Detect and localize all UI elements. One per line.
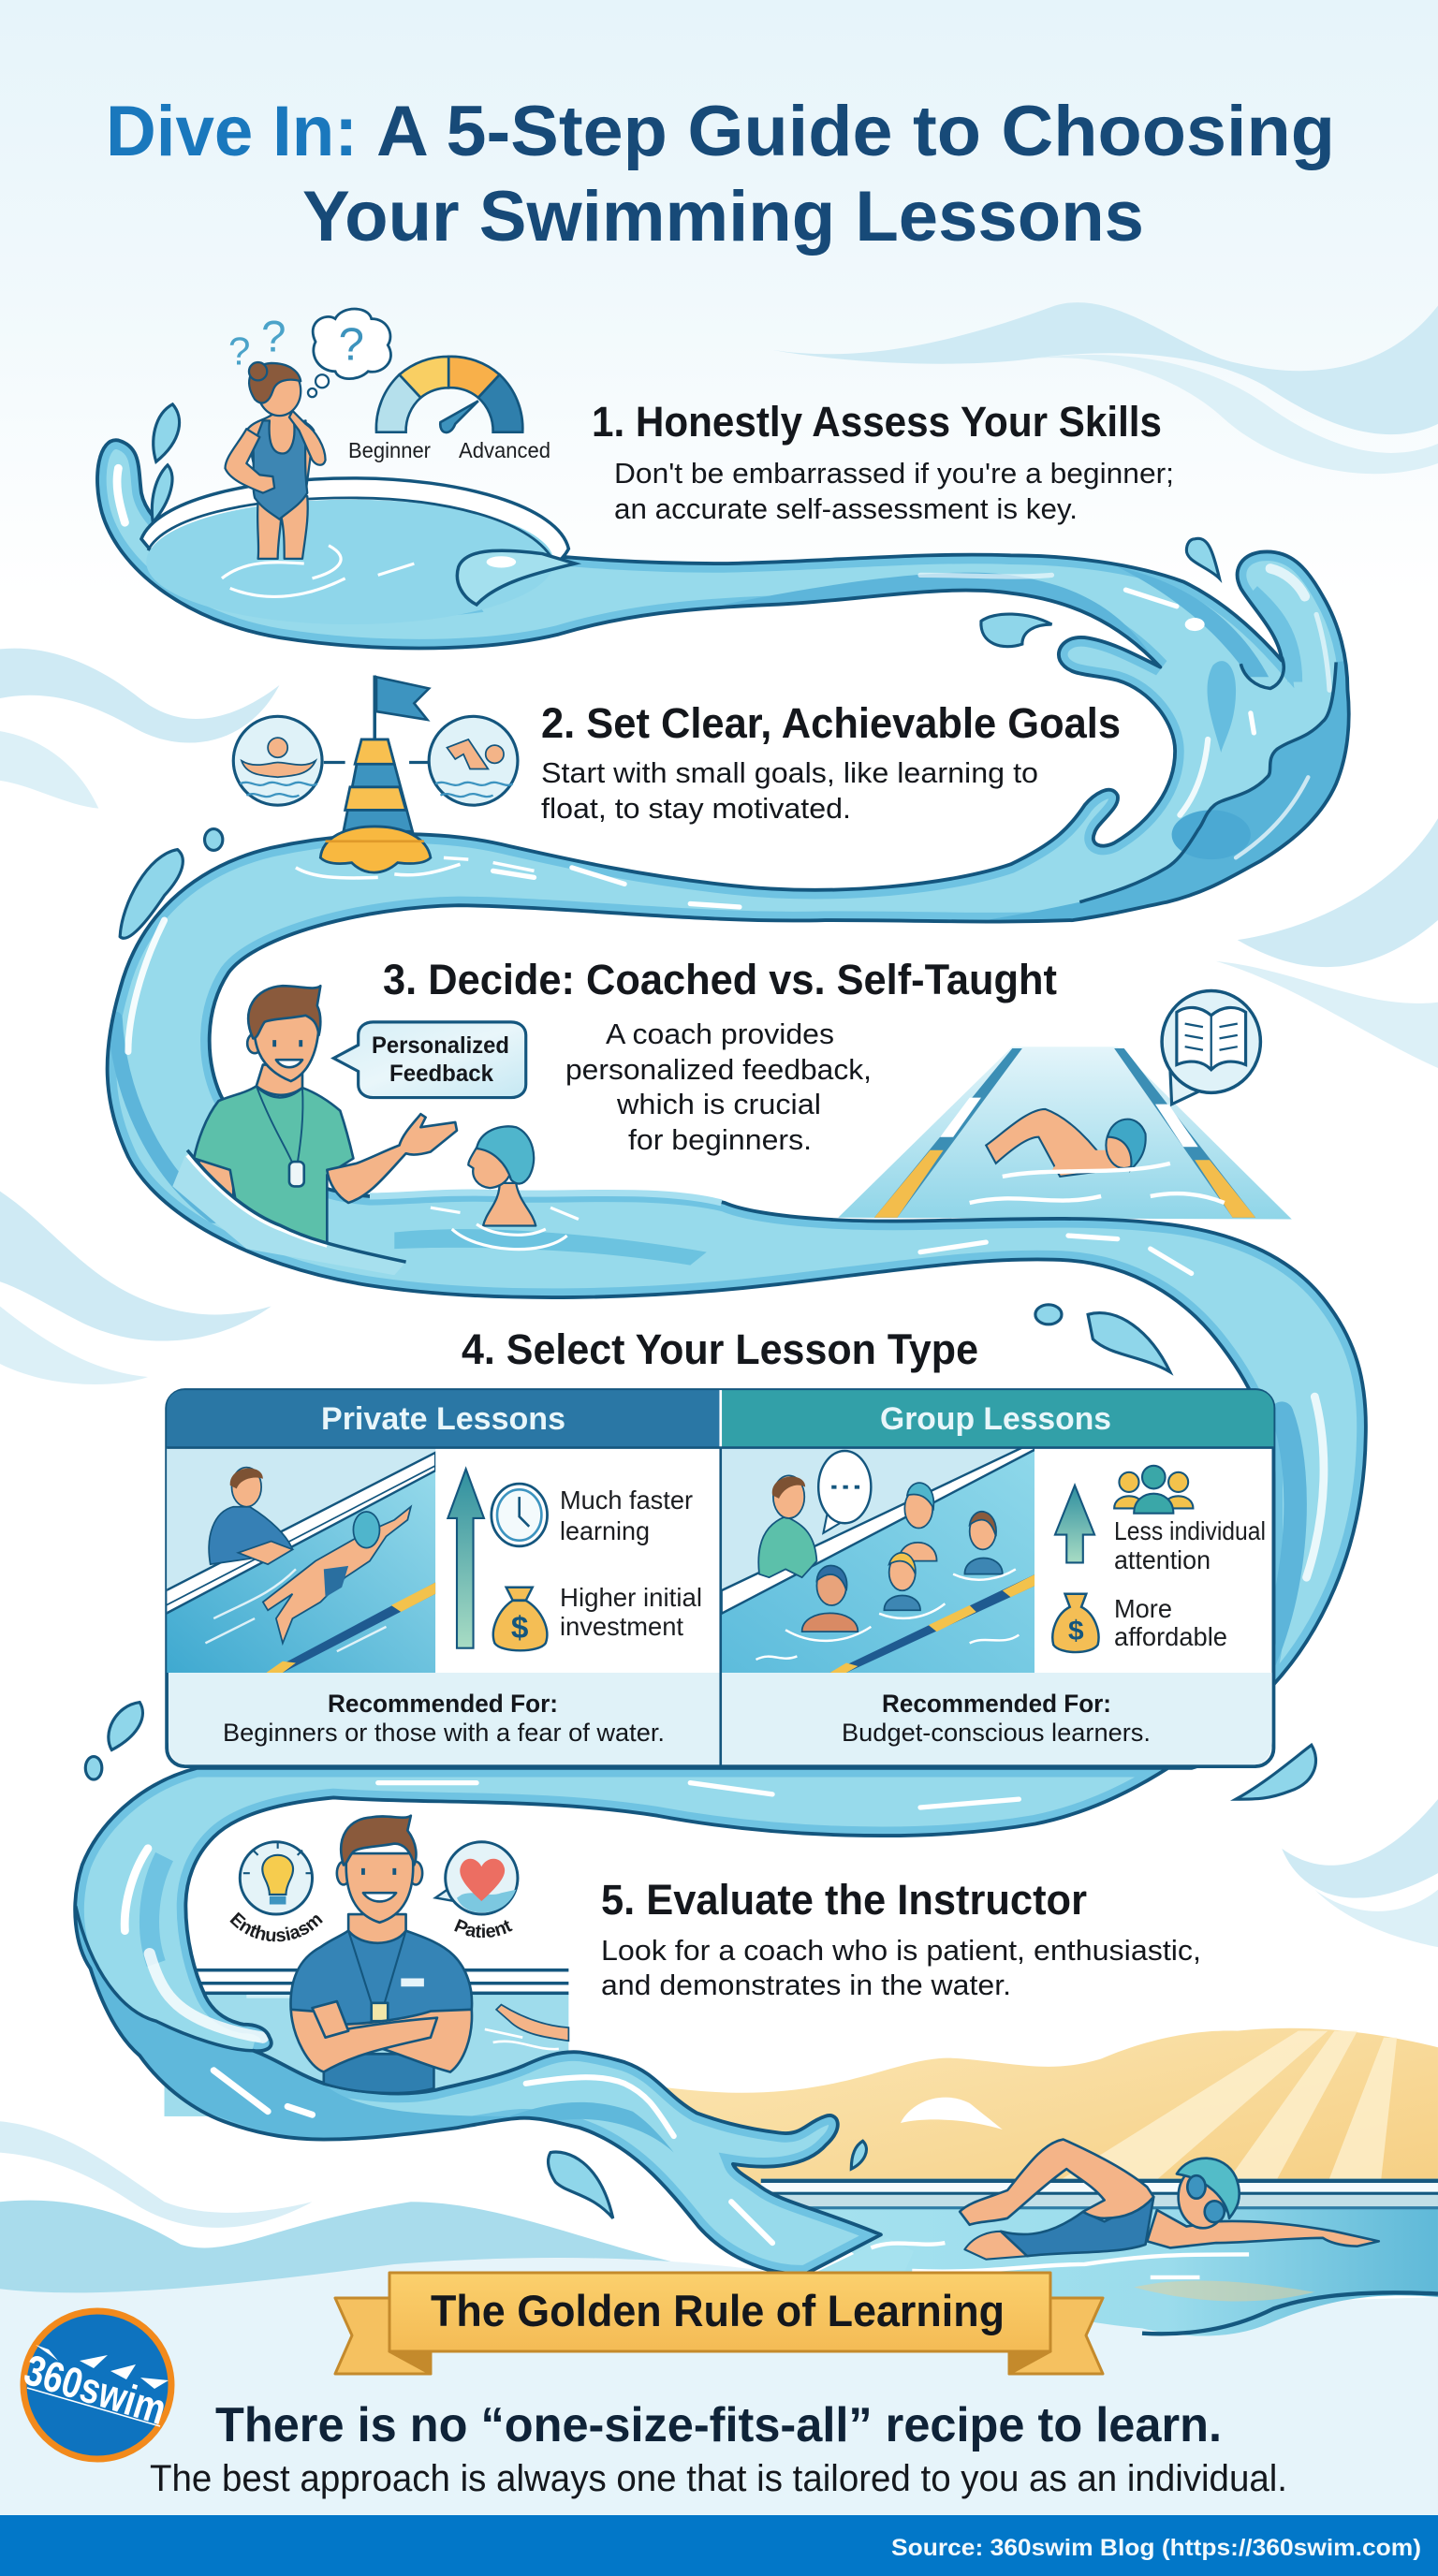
icon: heart bubble [435, 1842, 518, 1914]
step 4 comparison table [166, 1390, 1273, 1766]
icon: question marks [228, 313, 286, 373]
soft water surface by the girl [370, 1193, 722, 1203]
table benefit labels: Higher initial [560, 1583, 702, 1612]
icon: light bulb [240, 1842, 313, 1914]
gauge icon [376, 357, 522, 432]
golden rule message: The best approach is always one that is tailored to you as an individual. [150, 2458, 1287, 2499]
water drops [85, 404, 1316, 2218]
splash hook [1240, 657, 1284, 689]
speech bubble text [372, 1032, 509, 1087]
icon: thought cloud [308, 309, 390, 397]
speech bubble text: Feedback [389, 1061, 493, 1087]
arrow: faster learning [448, 1469, 484, 1648]
icon: thought cloud: ? [339, 319, 364, 370]
girl in water [431, 1126, 579, 1250]
ripples [205, 500, 414, 596]
final pool [761, 2179, 1438, 2336]
table recommendations: Recommended For: [328, 1690, 558, 1718]
table recommendations: Budget-conscious learners. [842, 1719, 1151, 1747]
water ribbon winding through all steps [59, 440, 1372, 2292]
table benefit labels: Less individual [1114, 1516, 1266, 1545]
flag [374, 675, 429, 739]
sand hills and sun rays [661, 2028, 1438, 2260]
step 3 text: personalized feedback, [565, 1053, 872, 1086]
golden rule message [150, 2398, 1287, 2499]
table benefit labels: Much faster [560, 1486, 693, 1515]
instructor figure [291, 1816, 472, 2093]
arrow: less attention [1055, 1486, 1094, 1562]
title: Dive In: [106, 92, 358, 171]
buoy and goal icons [233, 675, 535, 878]
table headers: Private Lessons [321, 1401, 565, 1437]
crossed arms [329, 2010, 472, 2072]
table benefit labels: investment [560, 1612, 683, 1641]
golden rule ribbon banner [335, 2273, 1103, 2374]
inner contour on lower left band [76, 1906, 253, 2051]
step 2 text: float, to stay motivated. [541, 792, 851, 825]
logo: 360swim: 360swim [19, 2345, 172, 2434]
step 5 text: 5. Evaluate the Instructor [601, 1876, 1087, 1924]
inner contour at right splash [1079, 662, 1336, 902]
icon: question marks: ? [261, 313, 286, 362]
step 4 heading: 4. Select Your Lesson Type [462, 1325, 978, 1373]
tail blend into pool [785, 2238, 914, 2292]
final swimmer [871, 2140, 1379, 2277]
header: private [167, 1390, 720, 1448]
table recommendations: Recommended For: [882, 1690, 1111, 1718]
shirt upper [291, 1931, 472, 2045]
table frame [167, 1390, 1273, 1766]
step 3 text: for beginners. [628, 1123, 812, 1156]
step 2 text [541, 699, 1121, 825]
step 1 text [592, 398, 1174, 525]
title [106, 92, 1335, 256]
step 3 text [383, 956, 1057, 1156]
instructor trait labels: Patient [454, 1919, 513, 1938]
icon: money bag group [1052, 1594, 1099, 1652]
gauge labels: Advanced [459, 438, 550, 462]
logo: 360swim [19, 2311, 172, 2459]
table headers [321, 1401, 1111, 1437]
instructor trait labels [229, 1911, 513, 1941]
table benefit labels: attention [1114, 1545, 1211, 1574]
speech bubble: personalized feedback [333, 1022, 526, 1098]
icon: book speech bubble [1162, 991, 1260, 1105]
photo: private lesson [166, 1448, 435, 1673]
bottom pale panel and wave [0, 2201, 1438, 2576]
step 1 text: an accurate self-assessment is key. [614, 492, 1078, 525]
title: Your Swimming Lessons [302, 177, 1144, 256]
table recommendations: Beginners or those with a fear of water. [223, 1719, 665, 1747]
buoy [320, 739, 431, 872]
step 5 text: Look for a coach who is patient, enthusiastic, [601, 1934, 1201, 1967]
icon: money bag private: $ [511, 1611, 529, 1646]
shirt lower [324, 2054, 433, 2093]
step 5 text [601, 1876, 1201, 2001]
background waves [0, 302, 1438, 2228]
coach head [254, 1011, 319, 1081]
coach back arm [198, 1150, 233, 1216]
whistle [289, 1162, 304, 1186]
table dividers [167, 1390, 1273, 1766]
ribbon band over coach [172, 1150, 406, 1275]
photo: group lesson [722, 1448, 1038, 1673]
table recommendations [223, 1690, 1151, 1747]
instructor trait labels: Enthusiasm [229, 1911, 323, 1941]
table benefit labels: More [1114, 1594, 1172, 1623]
icon: money bag private [493, 1588, 547, 1650]
coach arm [327, 1114, 457, 1203]
gauge labels [348, 438, 550, 462]
table headers: Group Lessons [880, 1401, 1111, 1437]
goal icon: swimming [429, 716, 518, 805]
table benefit labels: affordable [1114, 1622, 1227, 1651]
speech bubble text: Personalized [372, 1032, 509, 1059]
step 2 text: Start with small goals, like learning to [541, 756, 1038, 789]
woman figure [225, 362, 326, 559]
pool water [146, 500, 554, 624]
instructor pool scene background [165, 1969, 568, 2116]
top background gradient [0, 0, 1438, 599]
coach with swimmer [194, 986, 457, 1249]
step 3 text: A coach provides [606, 1017, 834, 1050]
head [337, 1862, 350, 1884]
neck [257, 1064, 302, 1095]
goal icon: floating [233, 716, 322, 805]
pool inner contour [148, 498, 552, 559]
lane illustration: self-taught swimmer [838, 1046, 1292, 1220]
pool rim [141, 478, 568, 569]
icon: clock [492, 1484, 548, 1546]
step 5 text: and demonstrates in the water. [601, 1969, 1011, 2001]
icon: people group [1114, 1466, 1193, 1514]
header: group [722, 1390, 1273, 1448]
table benefit labels [560, 1486, 1266, 1651]
source credit: Source: 360swim Blog (https://360swim.com) [891, 2535, 1421, 2561]
step 3 text: 3. Decide: Coached vs. Self-Taught [383, 956, 1057, 1003]
banner text: The Golden Rule of Learning [431, 2286, 1005, 2335]
recommendation bars [169, 1673, 1272, 1764]
icon: money bag group: $ [1068, 1616, 1084, 1647]
icon: question marks: ? [228, 329, 250, 373]
footer bar [0, 2515, 1438, 2576]
step 3 text: which is crucial [616, 1088, 821, 1120]
step 2 text: 2. Set Clear, Achievable Goals [541, 699, 1121, 747]
golden rule message: There is no “one-size-fits-all” recipe to learn. [215, 2398, 1222, 2452]
coach torso [194, 1086, 353, 1249]
gauge labels: Beginner [348, 438, 431, 462]
title: A 5-Step Guide to Choosing [376, 92, 1335, 171]
icon: chat bubble [818, 1451, 871, 1533]
step 1 text: Don't be embarrassed if you're a beginner; [614, 457, 1174, 490]
ribbon curl [457, 550, 575, 605]
step 1 text: 1. Honestly Assess Your Skills [592, 398, 1162, 446]
table benefit labels: learning [560, 1516, 650, 1545]
pool with woman thinking [141, 362, 575, 624]
